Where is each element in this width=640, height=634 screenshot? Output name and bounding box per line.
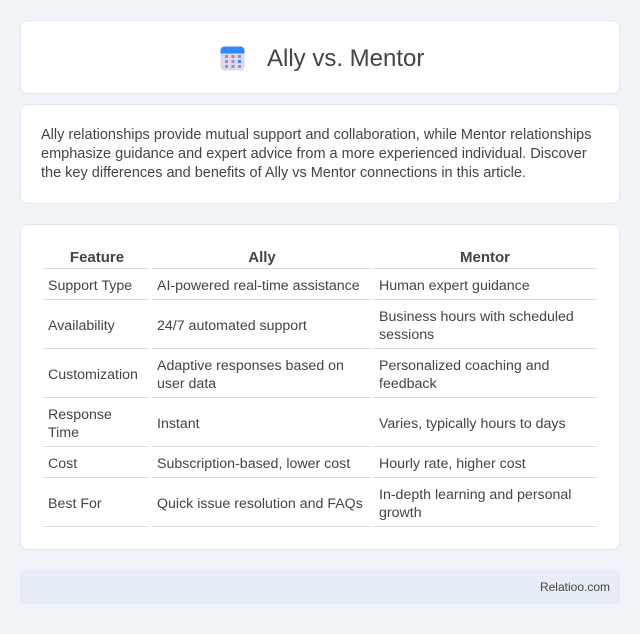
row: support type: Human expert guidance xyxy=(379,278,530,294)
row: cost: Subscription-based, lower cost xyxy=(157,456,350,472)
table header: Feature xyxy=(70,249,124,266)
row: response time xyxy=(48,407,566,441)
row: support type: AI-powered real-time assistance xyxy=(157,278,360,294)
row: response time: Time xyxy=(48,425,79,441)
intro text: emphasize guidance and expert advice from a more experienced individual. Discover xyxy=(41,146,587,162)
row: availability: Business hours with scheduled xyxy=(379,309,574,325)
row: availability: sessions xyxy=(379,327,434,343)
row: customization: feedback xyxy=(379,376,437,392)
row: best for: growth xyxy=(379,505,422,521)
intro text: Ally relationships provide mutual support and collaboration, while Mentor relationships xyxy=(41,127,592,143)
icon: calendar xyxy=(220,46,244,70)
row: customization: Customization xyxy=(48,367,138,383)
row: customization: Adaptive responses based on xyxy=(157,358,344,374)
row: cost: Cost xyxy=(48,456,77,472)
row: cost: Hourly rate, higher cost xyxy=(379,456,526,472)
panel: title card xyxy=(20,20,620,94)
row: availability: 24/7 automated support xyxy=(157,318,307,334)
row: best for: Best For xyxy=(48,496,102,512)
table header xyxy=(70,249,510,266)
row: response time: Instant xyxy=(157,416,200,432)
row: best for xyxy=(48,487,571,521)
intro text: the key differences and benefits of Ally vs Mentor connections in this article. xyxy=(41,165,526,181)
footer credit: Relatioo.com xyxy=(540,580,610,594)
row: best for: In-depth learning and personal xyxy=(379,487,571,503)
panel: comparison table xyxy=(20,224,620,550)
table header: Mentor xyxy=(460,249,510,266)
row: best for: Quick issue resolution and FAQs xyxy=(157,496,363,512)
footer bar xyxy=(20,570,620,604)
row: customization: Personalized coaching and xyxy=(379,358,549,374)
table header: Ally xyxy=(248,249,276,266)
panel: introduction xyxy=(20,104,620,204)
row: response time: Varies, typically hours to days xyxy=(379,416,566,432)
row: response time: Response xyxy=(48,407,112,423)
row: support type xyxy=(48,278,530,294)
intro text xyxy=(41,127,592,181)
title: Ally vs. Mentor xyxy=(267,45,424,72)
row: customization: user data xyxy=(157,376,216,392)
row: cost xyxy=(48,456,526,472)
row: availability: Availability xyxy=(48,318,115,334)
row: customization xyxy=(48,358,549,392)
row: support type: Support Type xyxy=(48,278,132,294)
row: availability xyxy=(48,309,574,343)
